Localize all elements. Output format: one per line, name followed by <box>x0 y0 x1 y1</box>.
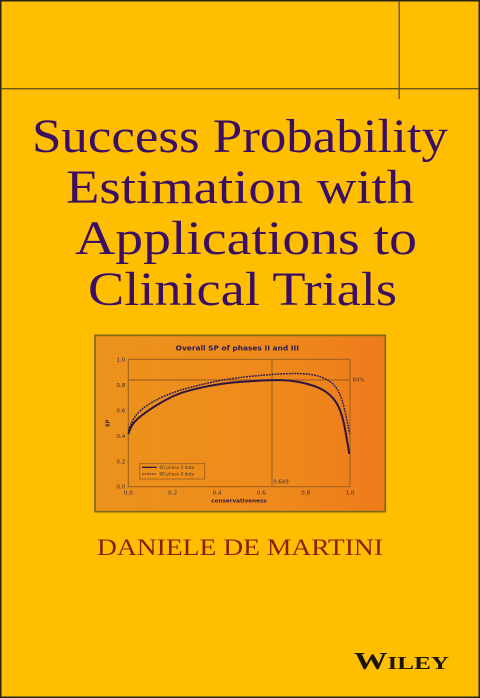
title: Estimation with <box>66 161 414 214</box>
annotation: 84%: 84% <box>353 378 365 384</box>
title: Success Probability <box>32 110 448 163</box>
horizontal rule <box>1 88 479 89</box>
title: Applications to <box>75 212 417 265</box>
title <box>32 110 448 316</box>
y axis title: SP <box>105 419 111 427</box>
y axis labels: 0.0 <box>116 485 126 491</box>
y axis labels: 1.0 <box>116 358 126 364</box>
title: Clinical Trials <box>88 263 397 316</box>
x axis labels <box>124 491 355 497</box>
chart title: Overall SP of phases II and III <box>176 345 299 353</box>
x axis labels: 0.6 <box>257 491 266 497</box>
plot frame and guides <box>128 359 350 487</box>
x axis labels: 0.2 <box>168 491 178 497</box>
publisher logo: W ILEY <box>354 649 449 675</box>
x axis labels: 0.8 <box>301 491 311 497</box>
curve: 60 phase II data <box>128 380 349 454</box>
y axis labels: 0.4 <box>116 434 126 440</box>
curve: 90 phase II data <box>128 374 350 434</box>
y axis labels: 0.2 <box>116 459 126 465</box>
legend: 90 phase II data <box>159 472 195 478</box>
legend: 60 phase II data <box>159 465 195 471</box>
y axis labels <box>116 358 126 491</box>
y axis labels: 0.8 <box>116 383 126 389</box>
x axis labels: 0.4 <box>212 491 222 497</box>
annotation: 0.649: 0.649 <box>273 480 289 486</box>
y axis labels: 0.6 <box>116 409 126 415</box>
vertical rule <box>398 1 400 99</box>
x axis title: conservativeness <box>211 499 267 505</box>
x axis labels: 0.0 <box>124 491 133 497</box>
author: DANIELE DE MARTINI <box>97 535 383 560</box>
legend <box>140 464 205 479</box>
chart background <box>95 335 385 512</box>
panel: chart <box>95 335 385 512</box>
x axis labels: 1.0 <box>345 491 355 497</box>
